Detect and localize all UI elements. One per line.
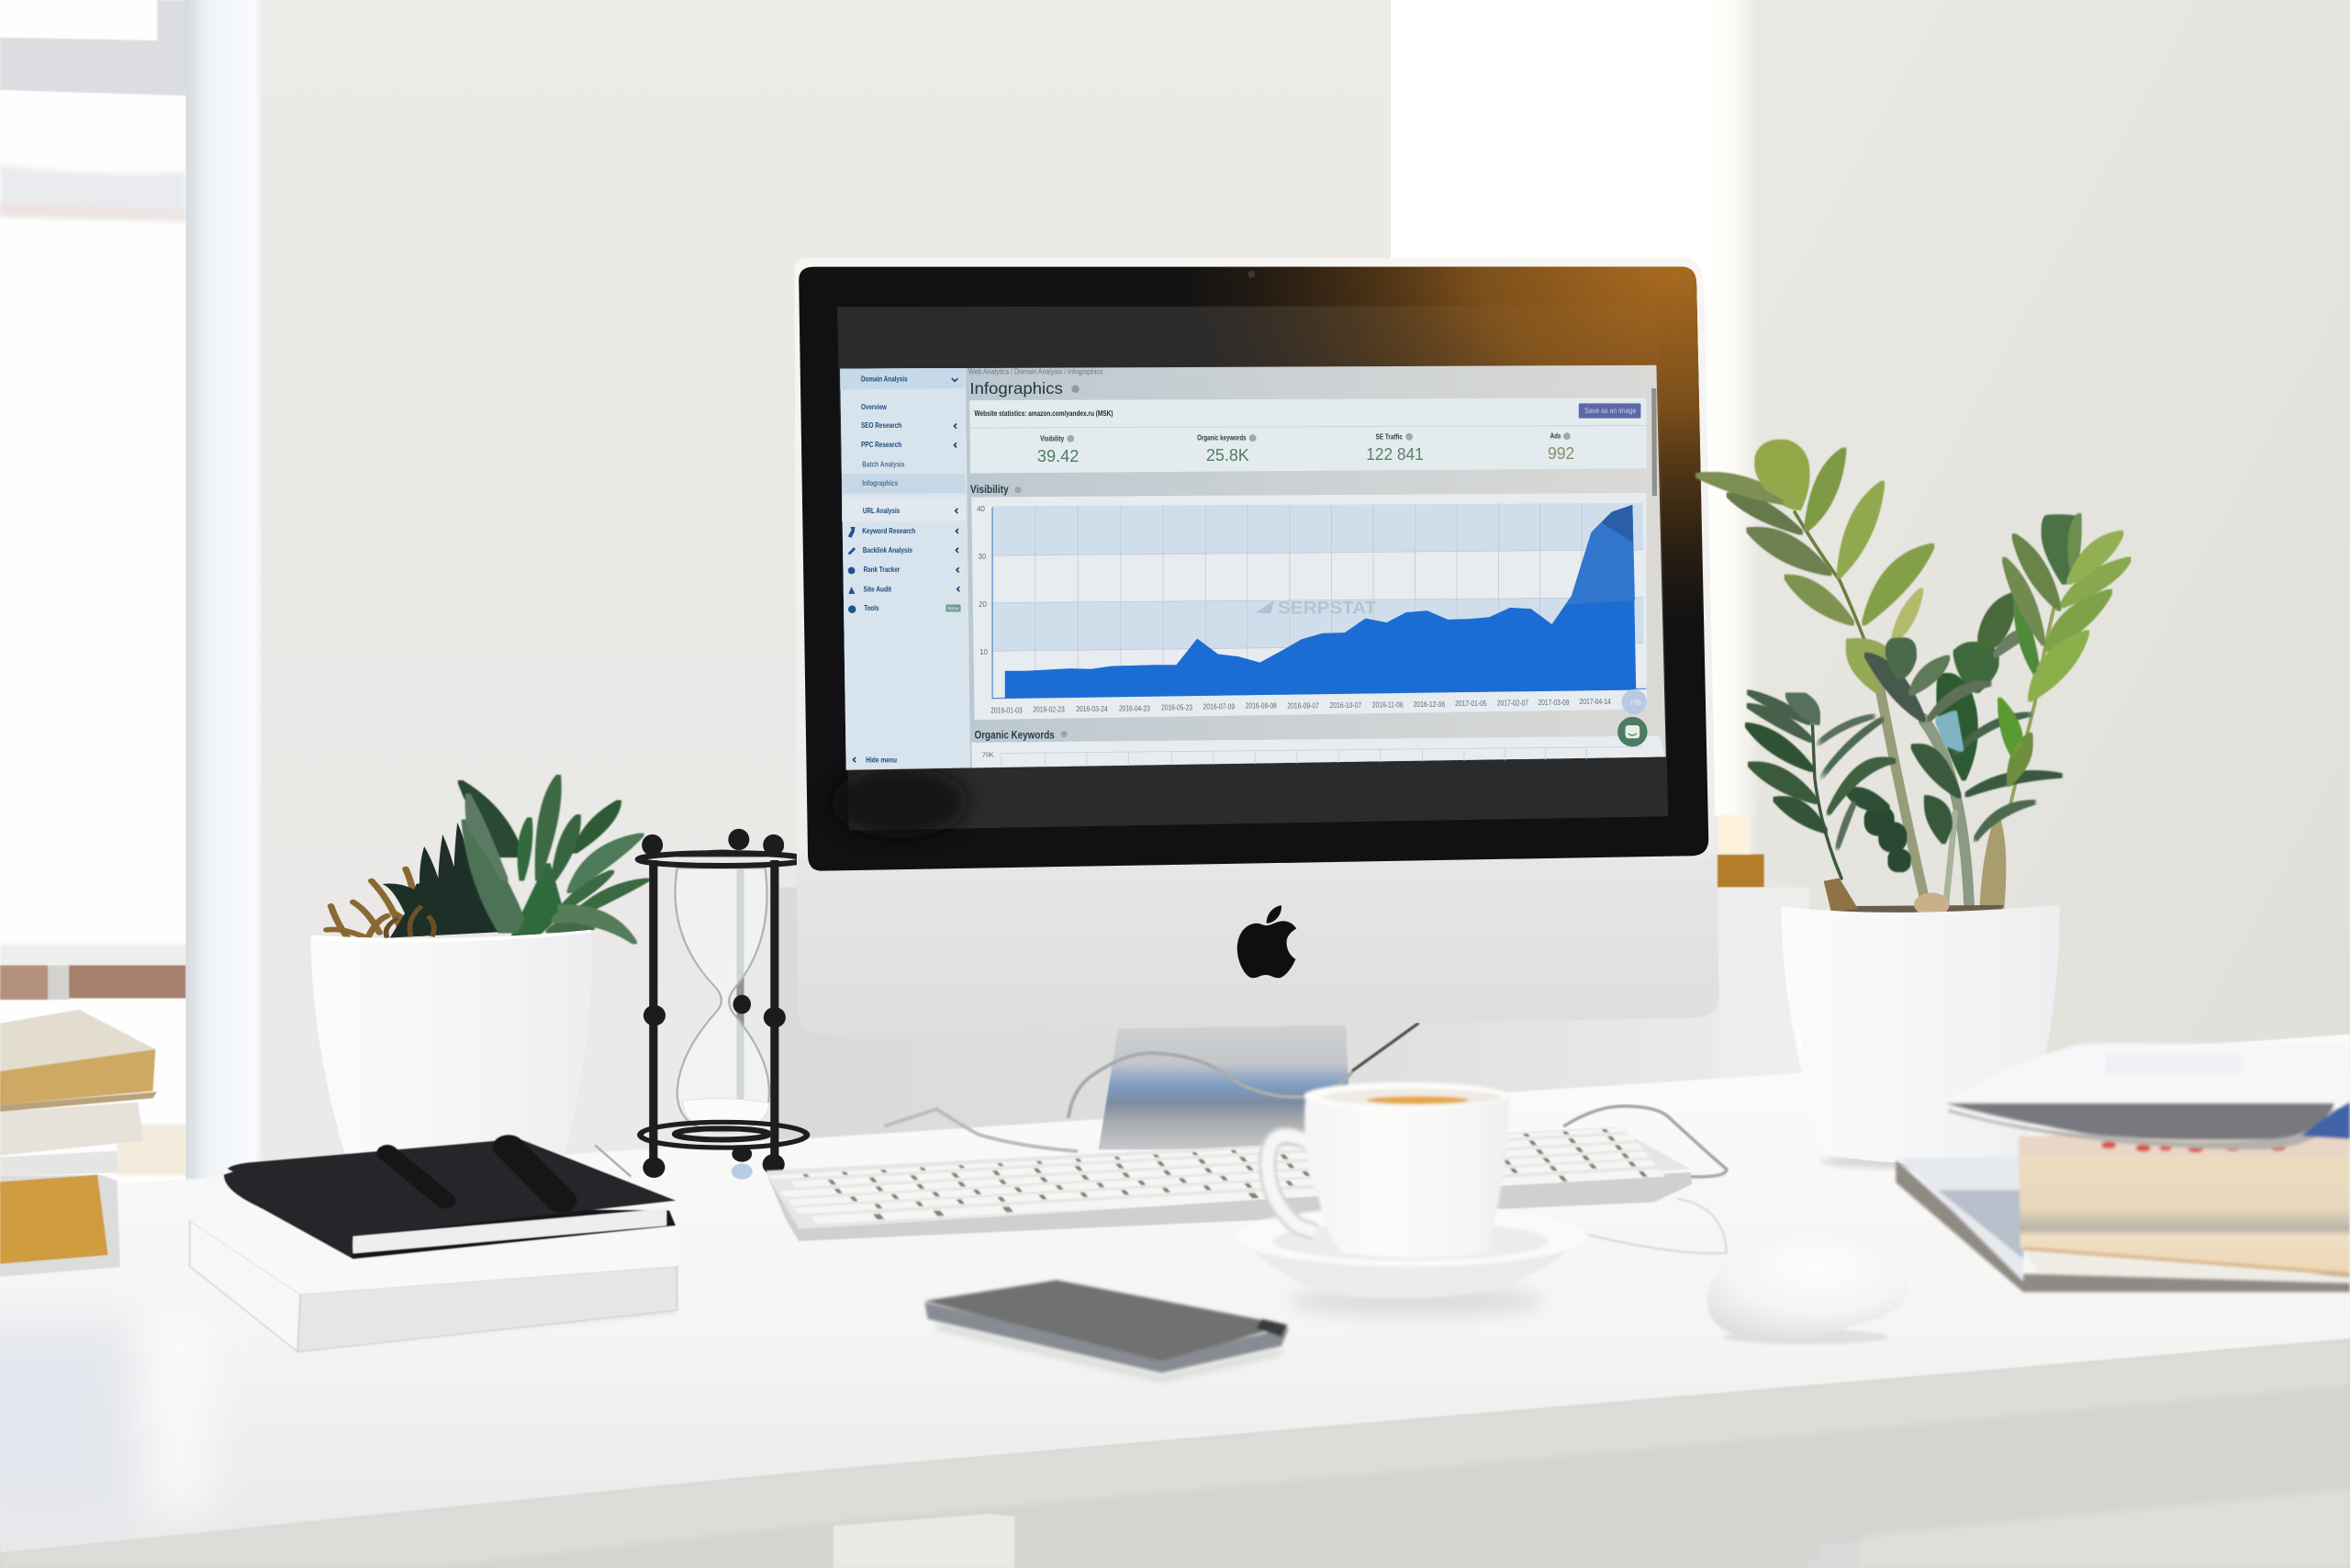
- magazine cover: [1900, 1157, 2023, 1282]
- window column: [185, 0, 263, 1184]
- coffee: [1367, 1096, 1469, 1104]
- bright central window: [1391, 0, 1713, 900]
- phone back: [924, 1280, 1287, 1361]
- phone shadow: [936, 1327, 1281, 1379]
- menu labels: Batch Analysis: [862, 459, 905, 468]
- window reflection on desk, blue: [0, 1319, 135, 1514]
- menu labels: Site Audit: [864, 584, 891, 593]
- pot highlight: [1794, 995, 1804, 1054]
- blue reflection: [732, 1163, 753, 1180]
- brick ledge: [0, 965, 185, 1000]
- glowing sill: [1718, 815, 1751, 855]
- white book front: [297, 1266, 677, 1352]
- cup inside: [1322, 1089, 1502, 1105]
- orange reflection: [799, 267, 1708, 871]
- phone camera end: [1256, 1319, 1287, 1337]
- apple logo on chin: [1237, 905, 1296, 978]
- stand loop cable: [1069, 1053, 1353, 1116]
- magazine photo: [1938, 1190, 2023, 1259]
- y axis labels: [977, 505, 989, 656]
- magazine edge: [1896, 1160, 2350, 1292]
- distant roof haze: [0, 945, 187, 965]
- x axis dates: 2016-11-06: [1372, 700, 1404, 709]
- keyboard plate: [766, 1127, 1691, 1229]
- saucer bowl: [1238, 1232, 1585, 1298]
- glass: [837, 306, 1668, 830]
- y axis labels: 40: [977, 505, 985, 513]
- notebook and white book: [190, 1139, 677, 1352]
- stat: ads: 992: [1548, 443, 1574, 463]
- x axis dates: 2016-02-23: [1033, 706, 1065, 714]
- leaves: yellow-green upper branch: [1696, 442, 1932, 690]
- menu labels: [861, 374, 915, 764]
- x axis dates: 2017-01-05: [1455, 700, 1487, 708]
- pink distant strip: [0, 202, 185, 220]
- x axis dates: 2017-02-07: [1497, 699, 1528, 707]
- menu labels: URL Analysis: [863, 506, 900, 515]
- hourglass: [639, 829, 807, 1180]
- info icon: [1014, 487, 1022, 493]
- white pot: [311, 930, 592, 1155]
- saucer inner: [1272, 1222, 1549, 1260]
- dark spiky plant: [382, 823, 503, 938]
- section heading: organic keywords: Organic Keywords: [975, 728, 1055, 741]
- left keyboard cable: [886, 1109, 1076, 1151]
- x axis dates: 2016-10-07: [1330, 701, 1361, 710]
- book 3: [0, 1151, 118, 1176]
- window frame bar: [0, 0, 196, 95]
- menu labels: Infographics: [862, 478, 899, 487]
- visibility area chart: [971, 493, 1647, 720]
- menu chevrons: [854, 378, 959, 762]
- cable reflection: [1589, 1199, 1727, 1253]
- coffee cup and saucer: [1235, 1082, 1585, 1298]
- sidebar icons: [848, 527, 856, 613]
- window reflection on desk, white: [150, 1319, 210, 1514]
- sidebar white divider: [842, 497, 966, 521]
- desk leg white: [834, 1514, 1014, 1568]
- faded upper area: [1566, 505, 1635, 605]
- soil: [1830, 905, 2004, 914]
- glass bulbs: [676, 868, 769, 1132]
- stat: ads: [1548, 432, 1574, 463]
- x axis dates: 2016-03-24: [1076, 705, 1108, 713]
- booklet printed text: [2106, 1054, 2241, 1075]
- x axis dates: 2016-07-09: [1203, 702, 1235, 711]
- lens: [1248, 271, 1255, 278]
- x axis dates: 2016-01-03: [990, 706, 1023, 714]
- x axis dates: [990, 698, 1612, 714]
- sidebar header: [840, 368, 964, 389]
- aloe green leaves: [460, 776, 648, 943]
- active menu row: [842, 474, 966, 494]
- thin metal object on desk: [595, 1145, 631, 1177]
- notebook pages: [352, 1208, 666, 1253]
- info icon: [1061, 731, 1068, 737]
- cup handle shadow: [1268, 1136, 1315, 1232]
- stat: SE traffic: [1366, 432, 1424, 464]
- keyboard front lip: [766, 1172, 1692, 1241]
- breadcrumb: Web Analytics / Domain Analysis / Infographics: [968, 367, 1102, 375]
- stat: organic keywords: Organic keywords: [1197, 434, 1247, 442]
- menu labels: Hide menu: [866, 755, 897, 764]
- glass dark reflection: [832, 766, 967, 838]
- x axis dates: 2017-03-09: [1539, 699, 1569, 707]
- top disc: [677, 850, 767, 857]
- menu labels: Rank Tracker: [864, 565, 901, 574]
- soft window edge: [1708, 0, 1756, 817]
- metal frame: [639, 853, 807, 1163]
- silver body and chin: [794, 258, 1719, 1035]
- leaves: dark left branch: [1747, 692, 1909, 870]
- thick book pages: [2019, 1156, 2350, 1274]
- main background: [840, 365, 1666, 770]
- y axis labels: 30: [978, 553, 987, 561]
- book cover top: [2019, 1127, 2350, 1157]
- menu labels: Keyword Research: [862, 526, 915, 535]
- left window: [0, 0, 196, 1184]
- stat: visibility: 39.42: [1037, 446, 1079, 465]
- right wall: [1756, 0, 2350, 1080]
- keys: [769, 1129, 1662, 1221]
- lower right wall under desk: [1798, 1490, 2350, 1568]
- book 2: [0, 1103, 143, 1156]
- right plant: [1696, 442, 2130, 1164]
- book 1 pages: [0, 1049, 155, 1105]
- gaps: [769, 1130, 1653, 1221]
- info icon: [1071, 386, 1080, 393]
- new badge: New: [947, 606, 959, 611]
- bulb: [1914, 892, 1950, 916]
- organic keywords chart stub: 70K: [982, 751, 994, 758]
- y axis: [992, 508, 1646, 699]
- right cable: [1564, 1106, 1727, 1177]
- menu labels: Tools: [864, 603, 879, 612]
- x axis dates: 2016-04-23: [1119, 704, 1150, 712]
- iMac monitor: [794, 258, 1719, 1035]
- stat: ads: Ads: [1550, 432, 1561, 441]
- horizontal bands: [992, 503, 1643, 555]
- left wall panel: [263, 0, 1391, 1184]
- saucer shadow: [1289, 1286, 1544, 1316]
- menu labels: SEO Research: [861, 420, 901, 430]
- stats card: [969, 398, 1647, 473]
- section heading: visibility: Visibility: [970, 483, 1009, 496]
- dried leaf base: [1824, 879, 1858, 913]
- rhizome: [1979, 811, 2006, 913]
- booklet lower page: [1948, 1109, 2338, 1149]
- stat: SE traffic: 122 841: [1366, 444, 1424, 464]
- white book top: [190, 1208, 677, 1294]
- book 1 top cover: [0, 1010, 155, 1071]
- save button: Save as an image: [1584, 407, 1636, 415]
- cup rim: [1304, 1082, 1507, 1109]
- booklet white page: [1944, 1043, 2350, 1112]
- brown dried leaves: [327, 869, 421, 938]
- magazine back white: [2026, 1251, 2350, 1283]
- white pot: [1782, 905, 2060, 1164]
- menu labels: Domain Analysis: [861, 374, 908, 383]
- grid: [992, 503, 1643, 698]
- back post: [734, 867, 747, 1103]
- stat: visibility: [1037, 434, 1079, 465]
- page title: Infographics: [969, 379, 1063, 398]
- right stack: magazine, book, booklet: [1896, 1043, 2350, 1292]
- x axis dates: 2017-04-14: [1579, 698, 1612, 706]
- screen web page: [840, 365, 1666, 770]
- pens: [387, 1147, 561, 1201]
- wall below monitor: [779, 888, 1798, 1157]
- new badge: [946, 605, 961, 611]
- white book left side: [190, 1220, 300, 1352]
- scrollbar: [1651, 388, 1657, 496]
- right wall sill panel: [1719, 888, 1809, 1082]
- menu labels: Overview: [861, 402, 887, 411]
- stat: SE traffic: SE Traffic: [1376, 432, 1403, 441]
- save button: [1579, 403, 1640, 419]
- stat: visibility: Visibility: [1040, 434, 1065, 442]
- book 1 back cover: [0, 1092, 157, 1112]
- leaves: dark centre branch: [1866, 594, 2062, 842]
- book 4 spine: [0, 1175, 120, 1277]
- cables: [886, 1024, 1727, 1253]
- phone: [924, 1280, 1289, 1373]
- key caps: [769, 1129, 1662, 1221]
- menu labels: Backlink Analysis: [863, 545, 912, 554]
- pot rim: [311, 930, 591, 943]
- phone edge: [924, 1303, 1289, 1373]
- notebook spine: [224, 1167, 353, 1259]
- y axis labels: 20: [979, 600, 987, 609]
- desk surface: [0, 1035, 2350, 1552]
- stems: [1795, 512, 2055, 907]
- keyboard: [766, 1127, 1692, 1241]
- cup body: [1304, 1097, 1509, 1258]
- brown dried foreground: [386, 906, 434, 938]
- frame knobs: [642, 829, 786, 1178]
- notebook cover: [228, 1139, 676, 1237]
- mouse shadow: [1724, 1329, 1888, 1344]
- leaves: bright right branch: [1999, 515, 2130, 785]
- scroll-to-top button: [1622, 689, 1647, 714]
- website label: Website statistics: amazon.com/yandex.ru (MSK): [975, 409, 1113, 418]
- saucer top: [1235, 1206, 1585, 1267]
- right pot contact shadow: [1821, 1154, 2031, 1169]
- y axis labels: 10: [979, 648, 989, 656]
- x axis dates: 2016-12-06: [1414, 700, 1445, 709]
- separator: [970, 425, 1646, 428]
- organic keywords chart stub: [971, 736, 1664, 767]
- book bottom cover line: [2023, 1249, 2350, 1274]
- x axis dates: 2016-08-08: [1246, 702, 1277, 711]
- monitor stand: [1099, 1025, 1348, 1149]
- x axis dates: 2016-05-23: [1161, 704, 1192, 712]
- desk front edge: [0, 1338, 2350, 1568]
- x axis dates: 2016-09-07: [1287, 702, 1319, 711]
- metal leg: [1819, 1544, 1858, 1568]
- warm floor: [117, 1124, 192, 1175]
- mouse body: [1707, 1233, 1909, 1339]
- left plant in white pot: [311, 776, 648, 1155]
- desk top: [0, 1035, 2350, 1568]
- orange ledge: [1718, 855, 1764, 888]
- booklet pages: [1945, 1102, 2335, 1140]
- area series: [1005, 505, 1636, 699]
- left stack of books: [0, 1010, 157, 1277]
- booklet blue cover: [2300, 1102, 2350, 1139]
- chart card: [971, 493, 1647, 720]
- background: wall: [0, 0, 2350, 1199]
- dark cable to monitor: [1353, 1024, 1417, 1070]
- notebook lower cover: [258, 1206, 676, 1259]
- scroll-to-top button: ↑%: [1629, 698, 1641, 707]
- top reflection on area: [1602, 505, 1633, 543]
- distant horizon strip: [0, 165, 185, 220]
- white book shadow: [195, 1222, 675, 1349]
- sidebar: [840, 368, 970, 770]
- black bezel: [799, 267, 1708, 871]
- stat: organic keywords: 25.8K: [1206, 445, 1249, 465]
- stat: organic keywords: [1197, 434, 1257, 465]
- menu labels: PPC Research: [861, 440, 901, 449]
- mouse: [1707, 1233, 1909, 1344]
- watermark: SERPSTAT: [1278, 598, 1376, 618]
- red title on book: [2101, 1141, 2286, 1153]
- desk underside: [0, 1334, 2350, 1568]
- book 4 pages: [0, 1175, 108, 1264]
- chat button: [1617, 717, 1648, 746]
- cup handle: [1268, 1136, 1315, 1232]
- sand: [682, 1099, 769, 1131]
